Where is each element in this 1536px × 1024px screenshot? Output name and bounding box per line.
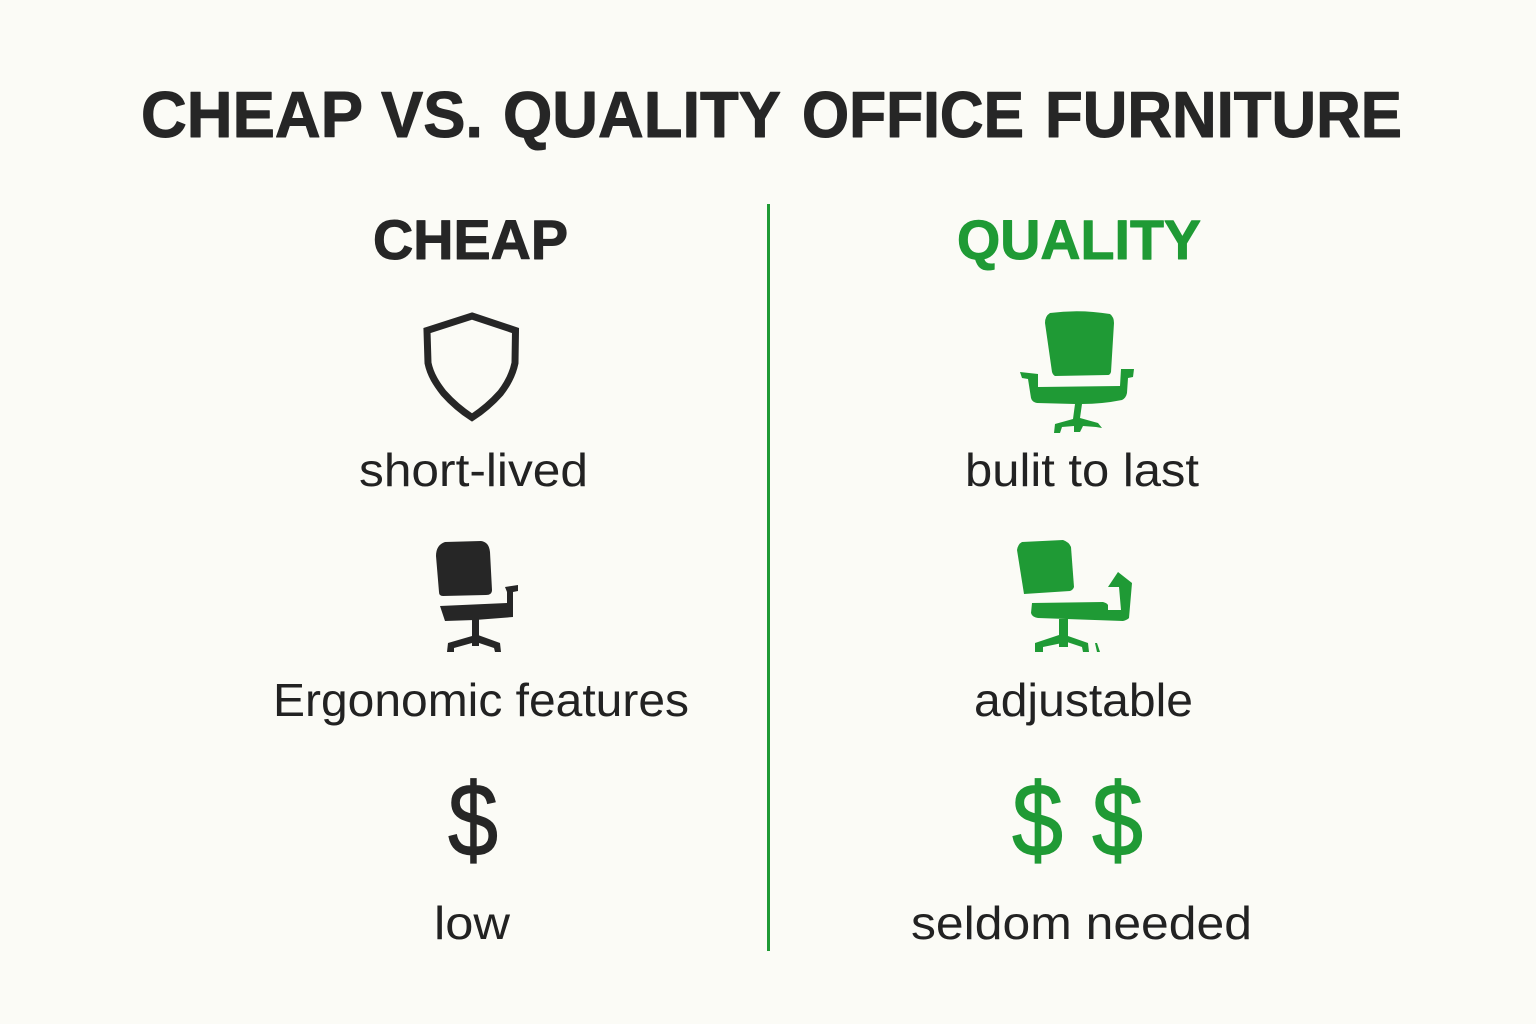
center divider — [767, 204, 770, 951]
label: seldom needed: seldom needed — [911, 897, 1252, 949]
icon: double dollar signs: $ — [1092, 763, 1143, 879]
icon: double dollar signs: $ — [1012, 763, 1063, 879]
panel: quality — [911, 208, 1252, 949]
label: short-lived: short-lived — [359, 444, 588, 496]
icon: green office chair — [1020, 311, 1134, 433]
title: FURNITURE — [1045, 78, 1402, 151]
icon: single dollar sign: $ — [448, 763, 498, 879]
icon: green chair with adjustable arrow — [1017, 540, 1132, 652]
title: VS. — [381, 78, 483, 151]
icon: double dollar signs — [1012, 763, 1143, 879]
label: bulit to last: bulit to last — [965, 444, 1199, 496]
icon: black office chair — [436, 541, 518, 652]
label: Ergonomic features: Ergonomic features — [273, 674, 689, 726]
title — [141, 78, 1402, 151]
label: low: low — [434, 897, 511, 949]
panel: cheap — [273, 208, 689, 949]
icon: shield outline — [427, 316, 516, 418]
title: OFFICE — [802, 78, 1024, 151]
title: CHEAP — [141, 78, 363, 151]
quality heading: QUALITY — [957, 208, 1201, 271]
label: adjustable: adjustable — [974, 674, 1193, 726]
title: QUALITY — [503, 78, 781, 151]
cheap heading: CHEAP — [373, 208, 568, 271]
